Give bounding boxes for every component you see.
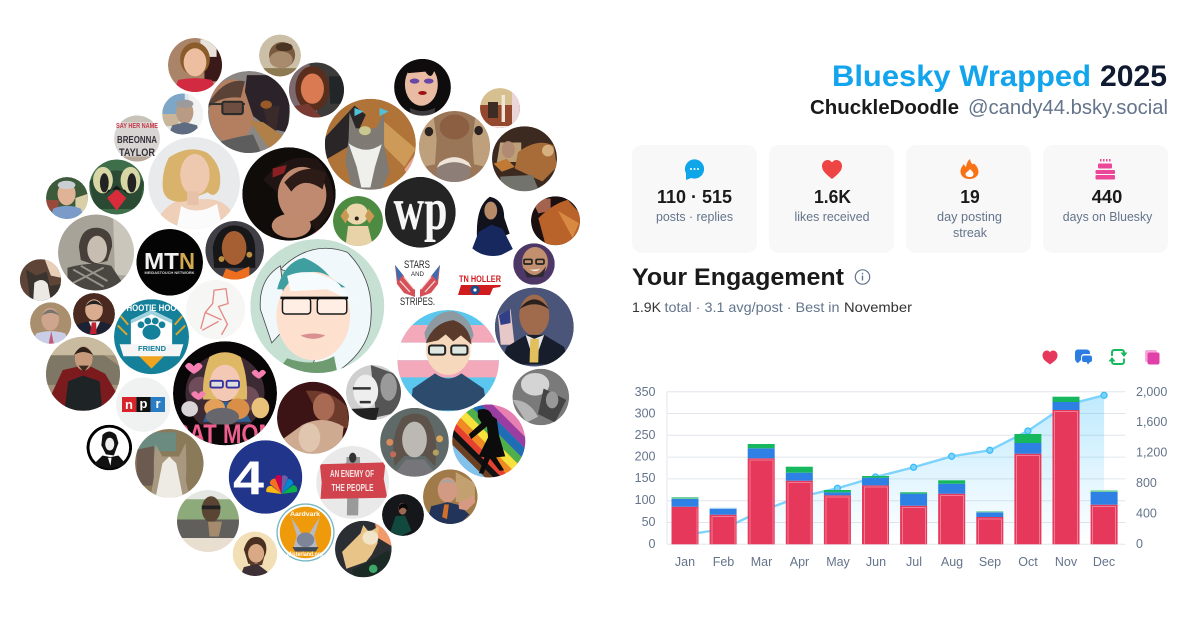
right axis labels: 2,000 — [1136, 385, 1167, 399]
avatar: cat mom bitmoji — [173, 341, 277, 449]
title: 2025 — [1100, 60, 1167, 93]
avatar: Pritzker portrait — [73, 293, 115, 335]
icon: heart — [822, 160, 842, 179]
bar: Sep — [976, 511, 1003, 544]
left axis labels — [635, 385, 656, 551]
bar: Feb — [710, 508, 737, 544]
avatar: Hootie Hoo friend badge: FRIEND — [138, 344, 167, 353]
stat card: day posting streak: streak — [953, 225, 987, 240]
stat card: likes received: 1.6K — [814, 187, 851, 207]
month labels: Oct — [1018, 555, 1038, 569]
avatar: congressman in suit — [495, 288, 574, 366]
avatar: cartoon person on trans flag — [398, 310, 499, 411]
stacked bars — [672, 397, 1118, 544]
title: Bluesky Wrapped — [832, 60, 1091, 93]
right axis labels — [1136, 385, 1167, 551]
right axis labels: 1,200 — [1136, 446, 1167, 460]
left axis labels: 50 — [642, 515, 656, 529]
avatar: NPR logo: r — [155, 396, 161, 411]
month labels: Sep — [979, 555, 1001, 569]
right axis labels: 400 — [1136, 506, 1157, 520]
avatar: grey and white cat — [135, 429, 204, 498]
avatar: woman with warm tones — [289, 62, 344, 118]
heading: Your Engagement: Your Engagement — [632, 264, 844, 291]
avatar: sepia room — [480, 88, 520, 128]
bar: Jun — [862, 476, 889, 544]
avatar: aardvark orange badge: Aardvark — [290, 511, 320, 518]
avatar: NPR logo: p — [140, 396, 148, 411]
avatar: main illustrated portrait with white hair — [250, 239, 384, 373]
avatar: red hair — [531, 196, 580, 245]
stat card: day posting streak — [906, 145, 1031, 253]
avatar: green cat mask — [89, 160, 144, 214]
avatar: woman in green dress — [382, 494, 424, 536]
avatar: Kaine portrait — [30, 302, 71, 344]
right axis labels: 800 — [1136, 476, 1157, 490]
user name and handle: @candy44.bsky.social — [968, 97, 1168, 119]
cumulative line — [685, 392, 1107, 535]
bar: Aug — [938, 480, 965, 544]
left axis labels: 200 — [635, 450, 656, 464]
chart legend — [1042, 350, 1160, 364]
engagement summary: 1.9K — [632, 299, 662, 315]
avatar: tabby cat — [20, 259, 61, 300]
bar: Mar — [748, 444, 775, 544]
grid — [667, 392, 1126, 544]
right axis labels: 1,600 — [1136, 415, 1167, 429]
icon: flame — [960, 159, 978, 179]
month labels: Aug — [941, 555, 963, 569]
avatar: drawing on white — [186, 280, 245, 339]
avatar: beach selfie — [162, 94, 203, 134]
avatar: pride flag silhouette — [452, 404, 526, 478]
avatar: tabby cat with bows — [325, 99, 416, 190]
avatar: black and white portrait — [58, 214, 134, 290]
icon: replies bubbles — [1075, 350, 1092, 364]
avatar: TN Holler logo — [458, 274, 501, 295]
month labels: May — [826, 555, 851, 569]
avatar: NPR logo — [116, 377, 171, 432]
icon: speech bubble — [685, 159, 704, 180]
left axis labels: 150 — [635, 471, 656, 485]
avatar: An Enemy of the People banner: THE PEOPLE — [332, 482, 374, 494]
stat card: posts and replies: posts · replies — [656, 209, 733, 224]
avatar: monochrome painting — [512, 369, 569, 425]
avatar: monochrome woman with curly hair — [346, 365, 401, 420]
right axis labels: 0 — [1136, 537, 1143, 551]
avatar: woman in warm light — [277, 382, 349, 454]
avatar: An Enemy of the People banner: AN ENEMY OF — [330, 469, 374, 480]
icon: likes heart — [1042, 350, 1058, 364]
avatar: older man smiling — [46, 177, 88, 219]
left axis labels: 300 — [635, 406, 656, 420]
bar: Oct — [1014, 434, 1041, 544]
avatar: Stars and Stripes logo — [395, 259, 440, 308]
avatar: MTN logo: N — [179, 248, 195, 274]
avatar: man with pet outdoors — [177, 490, 239, 552]
avatar: Stars and Stripes logo: AND — [411, 271, 424, 278]
avatar: bald man with glasses — [513, 243, 555, 285]
avatar: Breonna Taylor sign: TAYLOR — [119, 147, 155, 159]
month labels: Jun — [866, 555, 886, 569]
avatar: Breonna Taylor sign: SAY HER NAME — [116, 121, 158, 130]
avatar: NBC 4 logo: 4 — [233, 451, 264, 504]
stat card: likes received: likes received — [794, 209, 870, 224]
avatar: aardvark orange badge: Misterland.org — [287, 552, 323, 558]
stat card: days on Bluesky — [1043, 145, 1168, 253]
user name and handle — [810, 97, 1168, 119]
icon: quote squares — [1145, 350, 1160, 364]
avatar: man with dachshund — [208, 71, 290, 153]
avatar: Washington Post logo: wp — [394, 176, 448, 242]
left axis labels: 350 — [635, 385, 656, 399]
left axis labels: 100 — [635, 493, 656, 507]
avatar: bearded man with glasses — [233, 532, 277, 576]
avatar: Washington Post logo — [385, 176, 456, 248]
avatar: MTN logo — [136, 229, 203, 296]
engagement chart — [635, 385, 1167, 569]
left axis labels: 250 — [635, 428, 656, 442]
avatar: monochrome woman with hearts — [380, 408, 449, 477]
bar: Jan — [672, 497, 698, 544]
avatar: woman in dark room — [242, 147, 336, 241]
avatar: man pointing in suit — [423, 469, 478, 524]
avatar: woman in red jacket — [168, 38, 222, 92]
stat card: posts and replies — [632, 145, 757, 253]
avatar: woman with orange top — [205, 221, 264, 280]
avatar: aardvark orange badge — [276, 503, 335, 562]
avatar: Stars and Stripes logo: STARS — [404, 259, 430, 271]
icon: info — [855, 270, 870, 284]
avatar: An Enemy of the People banner — [316, 446, 389, 519]
avatar: golden retriever puppy — [333, 196, 383, 246]
engagement summary: November — [844, 299, 912, 315]
cumulative area — [685, 395, 1104, 544]
stat card: days on Bluesky: 440 — [1092, 187, 1122, 207]
left axis labels: 0 — [649, 537, 656, 551]
stat card: days on Bluesky: days on Bluesky — [1063, 209, 1153, 224]
month labels: Jul — [906, 555, 922, 569]
bar: Nov — [1052, 397, 1080, 544]
avatar: TN Holler logo: TN HOLLER — [459, 274, 501, 284]
avatar bubble cluster — [20, 34, 580, 577]
engagement summary — [632, 299, 912, 315]
avatar: MTN logo: MEIDASTOUCH NETWORK — [144, 271, 195, 275]
avatar: woman in navy blazer — [461, 192, 525, 256]
icon: repost arrows — [1108, 350, 1128, 364]
stat card: day posting streak: 19 — [960, 187, 980, 207]
avatar: Stars and Stripes logo: STRIPES. — [400, 296, 435, 308]
avatar: Lincoln engraving — [86, 425, 132, 470]
avatar: blonde woman — [148, 137, 240, 229]
stat card: day posting streak: day posting — [937, 209, 1002, 224]
avatar: man with dog and cat — [492, 126, 557, 191]
avatar: cat mom bitmoji: CAT MOM — [173, 419, 277, 449]
avatar: cow close-up — [419, 111, 490, 183]
avatar: goth woman — [394, 59, 451, 116]
avatar: Hootie Hoo friend badge: HOOTIE HOO — [126, 303, 176, 313]
stat card: likes received — [769, 145, 894, 253]
avatar: NBC 4 logo — [229, 440, 302, 514]
engagement summary: total · 3.1 avg/post · Best in — [664, 299, 840, 315]
avatar: Breonna Taylor sign: BREONNA — [117, 135, 157, 146]
avatar: NPR logo: n — [125, 397, 133, 412]
bar: Apr — [786, 467, 813, 544]
avatar: red caped sorcerer — [46, 337, 120, 411]
month labels: Apr — [790, 555, 809, 569]
avatar: Breonna Taylor sign — [114, 116, 160, 162]
month labels: Dec — [1093, 555, 1115, 569]
month labels: Feb — [713, 555, 734, 569]
bar: Jul — [900, 492, 927, 544]
avatar: orange kitten on keyboard — [335, 521, 392, 577]
avatar: shell object — [259, 34, 301, 76]
bar: Dec — [1091, 490, 1118, 544]
month labels — [675, 555, 1115, 569]
month labels: Nov — [1055, 555, 1078, 569]
avatar: MTN logo: MT — [144, 248, 179, 274]
month labels: Mar — [751, 555, 772, 569]
user name and handle: ChuckleDoodle — [810, 97, 959, 119]
stat card: posts and replies: 110 · 515 — [657, 187, 732, 207]
avatar: Hootie Hoo friend badge — [114, 299, 189, 374]
bar: May — [824, 490, 851, 544]
icon: birthday cake — [1096, 159, 1115, 180]
month labels: Jan — [675, 555, 695, 569]
